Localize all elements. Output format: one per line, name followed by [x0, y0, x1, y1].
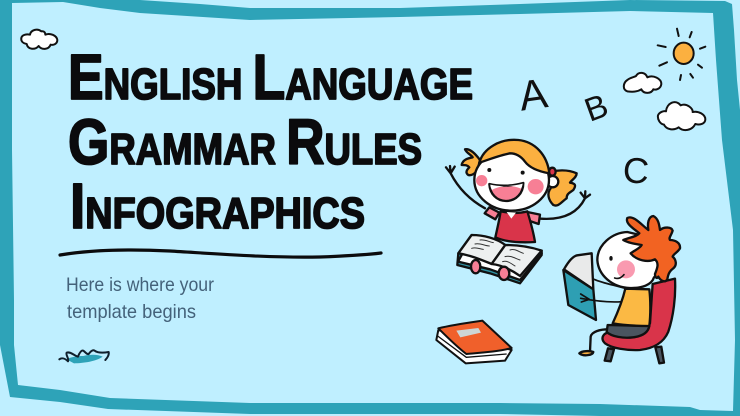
girl teeth — [490, 184, 523, 190]
icon: sun and clouds — [624, 29, 705, 130]
letter C: C — [622, 149, 650, 192]
subtitle line 2: template begins — [67, 301, 196, 323]
boy shirt — [613, 289, 650, 326]
icon: middle cloud — [624, 73, 661, 93]
boy pants — [607, 325, 649, 338]
boy smile — [615, 275, 624, 278]
girl page lines — [472, 240, 523, 266]
bottom pages — [436, 330, 512, 363]
underline stroke — [60, 250, 381, 257]
boy eye — [609, 256, 613, 261]
illustration: stack of orange books — [436, 321, 512, 363]
girl mouth — [489, 183, 523, 201]
girl eyes — [487, 168, 525, 175]
girl right pigtail — [548, 170, 577, 206]
boy leg and shoe — [590, 329, 608, 352]
girl dress — [495, 211, 535, 242]
girl arms — [446, 166, 590, 219]
letter A: A — [516, 69, 550, 120]
title line 2: GRAMMAR RULES — [68, 106, 422, 178]
illustration: boy reading on chair — [563, 216, 680, 363]
title line 1: ENGLISH LANGUAGE — [68, 41, 473, 113]
icon: grass tuft — [59, 350, 109, 363]
boy book cover — [563, 270, 596, 320]
girl cheeks — [476, 175, 544, 194]
boy head — [597, 232, 659, 288]
icon: small cloud top left — [21, 30, 57, 49]
boy arms — [581, 279, 626, 302]
illustration: girl reading — [446, 140, 590, 283]
subtitle line 1: Here is where your — [66, 274, 214, 296]
girl hair — [479, 140, 549, 173]
book label — [456, 328, 481, 337]
icon: lower cloud — [658, 102, 705, 130]
girl left pigtail — [462, 149, 480, 175]
girl collar — [507, 212, 516, 219]
icon: sun — [658, 29, 705, 80]
boy hair — [623, 216, 680, 281]
boy book pages — [564, 253, 593, 289]
subtitle — [66, 274, 214, 323]
girl head — [474, 149, 549, 211]
chair legs — [605, 347, 664, 363]
letter B: B — [579, 86, 613, 129]
chair — [603, 279, 675, 350]
boy cheek — [617, 260, 635, 278]
girl ear — [547, 176, 558, 187]
title — [68, 41, 473, 242]
girl feet — [471, 260, 480, 273]
book cover — [438, 321, 512, 354]
girl sleeves — [485, 207, 540, 224]
title line 3: INFOGRAPHICS — [70, 170, 365, 242]
girl book — [457, 235, 542, 283]
girl hair tie — [549, 168, 556, 176]
